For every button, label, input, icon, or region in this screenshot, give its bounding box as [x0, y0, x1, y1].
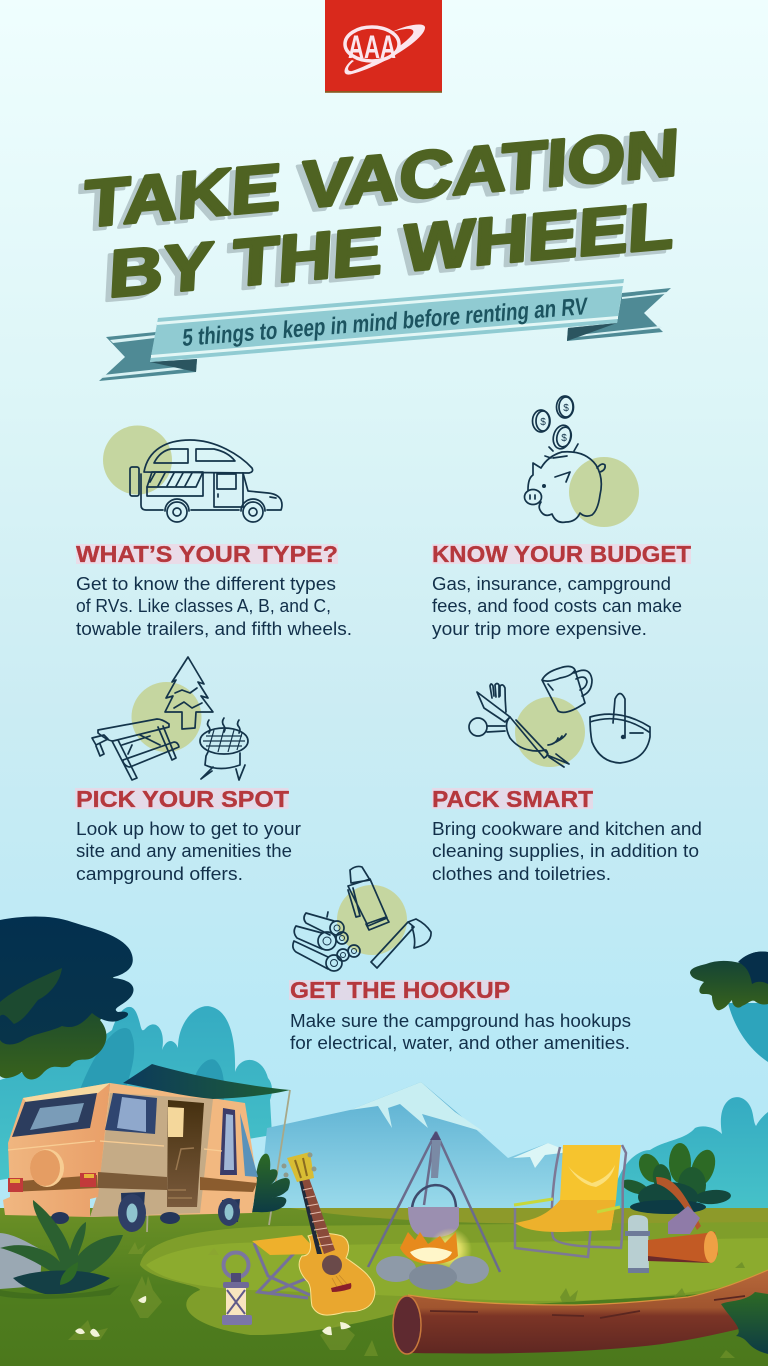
body text: Make sure the campground has hookups — [290, 1011, 631, 1031]
icon: piggy bank and coins: $ — [540, 417, 546, 428]
tree canopy top left — [0, 916, 133, 1080]
guitar — [282, 1152, 375, 1315]
section: know your budget — [432, 396, 691, 639]
body text: site and any amenities the — [76, 841, 292, 861]
body text: Bring cookware and kitchen and — [432, 819, 702, 839]
fallen log — [393, 1270, 768, 1354]
body text: fees, and food costs can make — [432, 596, 682, 616]
body text — [432, 574, 682, 639]
lawn chair — [514, 1145, 626, 1257]
grass tufts and flowers — [68, 1242, 745, 1358]
title line 1: TAKE VACATION — [82, 116, 681, 242]
bush behind motorhome — [252, 1154, 290, 1212]
icon: camp cookware — [469, 666, 650, 767]
cooking pot — [408, 1207, 459, 1238]
rear window — [12, 1093, 97, 1137]
section: get the hookup — [289, 866, 631, 1053]
icon: logs, thermos and axe — [293, 866, 431, 971]
heading: KNOW YOUR BUDGET — [432, 541, 691, 567]
body text — [290, 1011, 631, 1053]
spare wheel cover — [30, 1149, 64, 1187]
body text: cleaning supplies, in addition to — [432, 841, 699, 861]
motorhome rear — [3, 1083, 110, 1217]
door — [167, 1100, 204, 1207]
bush right — [620, 1143, 732, 1214]
body text: Look up how to get to your — [76, 819, 301, 839]
heading: GET THE HOOKUP — [290, 977, 510, 1003]
folding stool — [252, 1235, 316, 1298]
ground — [0, 1208, 768, 1366]
body text: your trip more expensive. — [432, 619, 647, 639]
flames — [400, 1232, 458, 1264]
awning — [123, 1064, 290, 1099]
rock left — [0, 1233, 42, 1289]
heading: PICK YOUR SPOT — [76, 786, 289, 812]
campfire with tripod and pot — [368, 1131, 500, 1290]
plant — [0, 1200, 123, 1294]
wheels — [160, 1212, 180, 1224]
icon: RV camper — [103, 426, 282, 522]
icon: picnic table, tree and grill — [92, 657, 248, 780]
section: what's your type — [76, 426, 352, 639]
title line 2 shadow: BY THE WHEEL — [101, 192, 670, 316]
body text: Gas, insurance, campground — [432, 574, 671, 594]
mountains — [258, 1082, 640, 1215]
pot handle — [412, 1185, 456, 1208]
section: pick your spot — [75, 657, 301, 884]
tripod — [368, 1132, 500, 1272]
icon: piggy bank and coins: $ — [563, 403, 569, 414]
subtitle text: 5 things to keep in mind before renting an RV — [182, 293, 588, 352]
body text: Get to know the different types — [76, 574, 336, 594]
heading: WHAT’S YOUR TYPE? — [76, 541, 338, 567]
background darker foliage — [80, 1028, 224, 1120]
body text — [76, 574, 352, 639]
foliage top right — [690, 952, 768, 1062]
title line 2: BY THE WHEEL — [107, 188, 676, 312]
stump log with axe — [648, 1177, 718, 1263]
side window — [105, 1093, 157, 1134]
awning shade on side — [90, 1093, 213, 1217]
rocks — [376, 1256, 416, 1282]
bush bottom right — [721, 1292, 768, 1354]
grass patches — [0, 1208, 768, 1335]
body text — [76, 819, 301, 884]
title — [76, 116, 681, 316]
AAA logo — [325, 0, 442, 93]
body text: campground offers. — [76, 864, 243, 884]
tail lights — [8, 1178, 23, 1192]
body stripes — [8, 1175, 98, 1192]
icon: piggy bank and coins — [524, 396, 639, 527]
section: pack smart — [432, 666, 702, 884]
awning poles — [147, 1065, 290, 1232]
body text: clothes and toiletries. — [432, 864, 611, 884]
body text: towable trailers, and fifth wheels. — [76, 619, 352, 639]
body text — [432, 819, 702, 884]
subtitle ribbon — [99, 279, 671, 381]
AAA logo: AAA — [348, 29, 396, 65]
body text: for electrical, water, and other amenities. — [290, 1033, 630, 1053]
motorhome side — [90, 1083, 257, 1217]
body text: of RVs. Like classes A, B, and C, — [76, 596, 331, 616]
lantern — [222, 1252, 252, 1325]
icon: piggy bank and coins: $ — [561, 433, 567, 444]
fire glow — [428, 1228, 472, 1272]
background teal bushes right — [610, 1097, 768, 1215]
thermos — [625, 1215, 650, 1273]
background teal trees left — [0, 1006, 272, 1180]
heading: PACK SMART — [432, 786, 593, 812]
front window — [220, 1108, 237, 1175]
title line 1 shadow: TAKE VACATION — [76, 120, 675, 246]
motorhome — [3, 1064, 290, 1232]
